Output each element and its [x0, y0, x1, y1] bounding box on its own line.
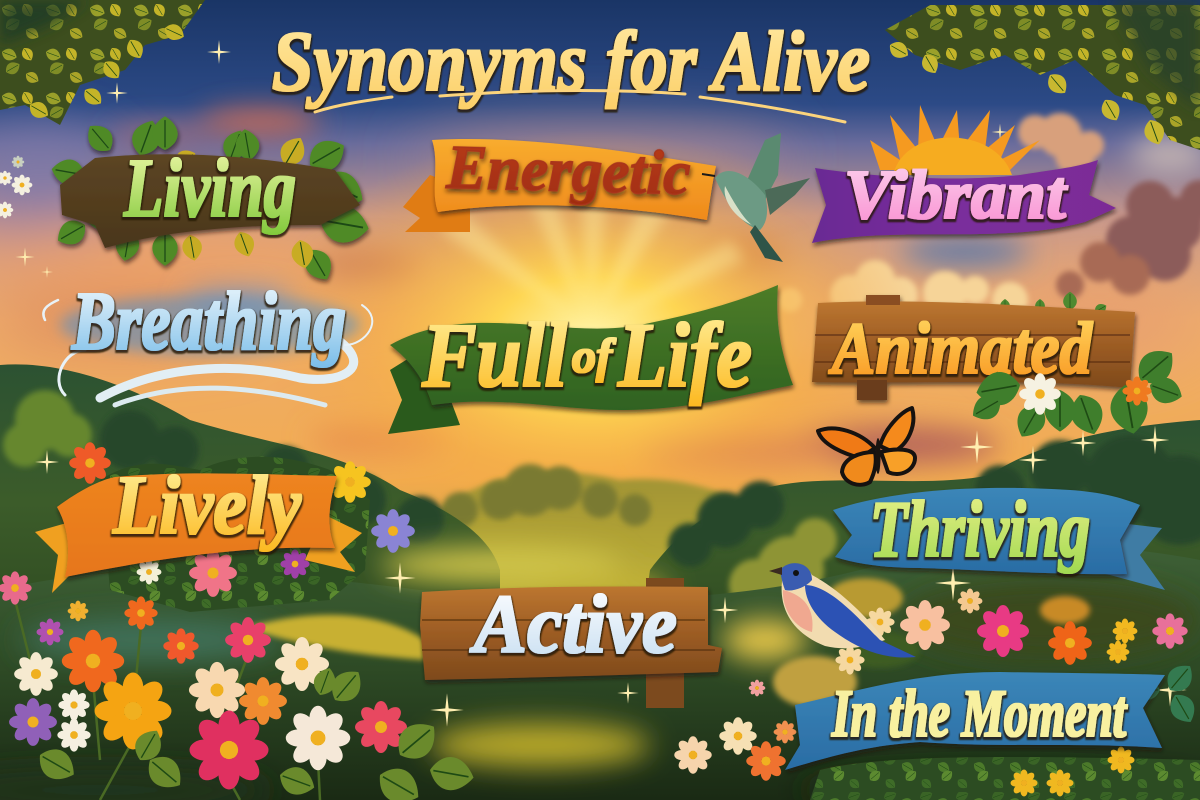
meadow foreground	[0, 546, 1200, 800]
banner: Vibrant	[812, 105, 1116, 243]
Energetic label: Energetic	[445, 134, 691, 208]
stems	[15, 600, 320, 800]
sign: Animated	[812, 292, 1186, 443]
Full of Life label: Full	[421, 304, 567, 406]
meadow flowers left	[0, 571, 476, 800]
Full of Life label: of	[572, 330, 616, 383]
Active label: Active	[469, 578, 677, 671]
yellow grass strip	[245, 615, 425, 660]
cumulus clouds right	[778, 113, 1200, 318]
banner: Thriving	[833, 486, 1165, 590]
glowing sun with rays	[260, 130, 920, 550]
Full of Life label: Life	[617, 304, 752, 406]
Breathing label: Breathing	[71, 275, 346, 368]
Full of Life label	[421, 304, 752, 406]
banner: Full of Life	[388, 285, 793, 434]
white flowers left edge	[0, 156, 32, 218]
Living wood board	[60, 154, 360, 248]
distant hills and forest	[0, 364, 1200, 640]
icon: bluebird	[769, 563, 916, 658]
wordart: Breathing with wind swirls	[43, 275, 372, 405]
blue halo	[60, 295, 360, 355]
Lively label: Lively	[112, 459, 302, 552]
tree foliage top right	[885, 0, 1200, 150]
tree foliage top left	[0, 0, 205, 125]
bushes behind Lively	[100, 457, 370, 612]
Vibrant label: Vibrant	[844, 157, 1069, 234]
sign: Active	[420, 578, 722, 708]
banner: Lively	[35, 442, 415, 597]
Animated top leaves	[1000, 292, 1109, 316]
Thriving label: Thriving	[870, 486, 1090, 574]
sun behind Vibrant	[870, 105, 1040, 175]
flowers around Lively	[69, 442, 415, 597]
banner: Energetic	[403, 134, 716, 232]
meadow flowers right	[674, 578, 1200, 800]
leaves and flowers on Animated	[967, 341, 1186, 443]
Active post	[646, 578, 684, 708]
banner: In the Moment	[785, 672, 1165, 770]
sunset clouds	[0, 108, 1200, 466]
icon: hummingbird	[702, 133, 810, 262]
Living label: Living	[123, 142, 296, 235]
title underline swash	[315, 90, 845, 122]
title: Synonyms for Alive: Synonyms for Alive	[272, 13, 870, 109]
wind swirls	[43, 300, 372, 405]
Animated wood board	[812, 295, 1135, 400]
Animated label: Animated	[828, 308, 1093, 390]
sign: Living	[50, 116, 372, 286]
leaves behind Living board	[50, 116, 372, 286]
Active wood board	[420, 587, 722, 680]
icon: monarch butterfly	[818, 408, 915, 485]
